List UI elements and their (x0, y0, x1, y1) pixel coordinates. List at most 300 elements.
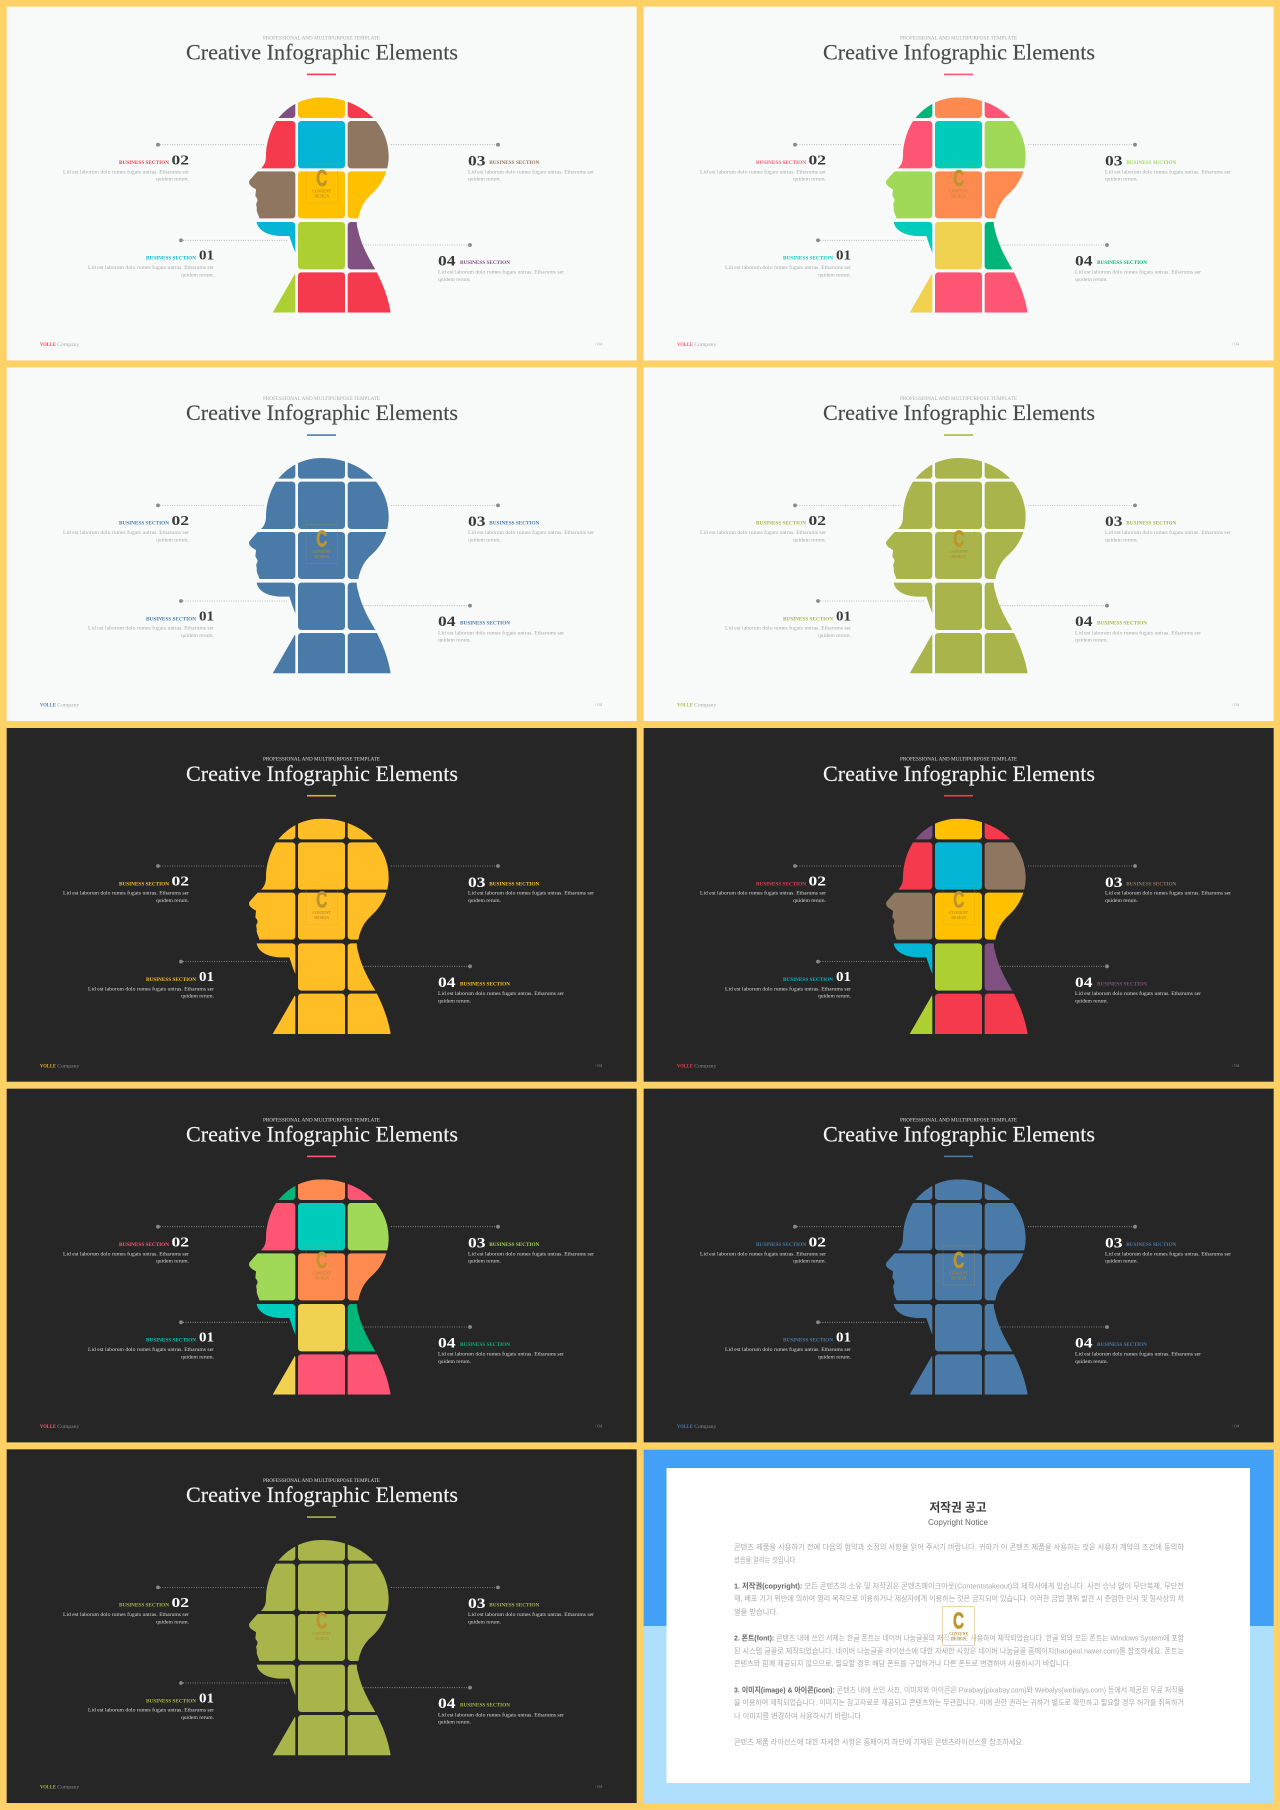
section 02: 02 (808, 152, 826, 167)
section 03 (1105, 875, 1231, 904)
section 01 (725, 248, 852, 278)
section 02: Lid est laborum dolo rumes fugats untras. Etharums ser (700, 168, 826, 175)
section 03 (1105, 154, 1231, 183)
watermark (306, 525, 338, 564)
section 04: quidem rerum. (1075, 1359, 1109, 1365)
leader 03 (1028, 503, 1137, 507)
section 01: Lid est laborum dolo rumes fugats untras. Etharums ser (725, 1346, 851, 1353)
section 02: Lid est laborum dolo rumes fugats untras. Etharums ser (700, 1250, 826, 1257)
leader 01 (179, 1681, 288, 1685)
footer (677, 342, 1240, 348)
watermark: CONTENT (949, 911, 969, 915)
section 01: 01 (199, 969, 214, 984)
leader 02 (793, 1225, 901, 1229)
section 01: 01 (836, 1330, 851, 1345)
watermark: C (953, 165, 964, 191)
section 03: Lid est laborum dolo rumes fugats untras. Etharums ser (468, 168, 594, 175)
section 02: Lid est laborum dolo rumes fugats untras. Etharums ser (63, 1250, 189, 1257)
section 01: quidem rerum. (181, 994, 215, 1000)
heading: Creative Infographic Elements (186, 40, 458, 64)
section 01: Lid est laborum dolo rumes fugats untras. Etharums ser (88, 985, 214, 992)
heading: PROFESSIONAL AND MULTIPURPOSE TEMPLATE (263, 757, 381, 763)
section 01: 01 (199, 1330, 214, 1345)
section 01: 01 (199, 1690, 214, 1705)
section 04 (438, 1696, 564, 1726)
footer: Company (694, 1063, 716, 1069)
heading (823, 35, 1095, 75)
copyright body: 을 이용하여 제작되었습니다. 이미지는 참고자료로 제공되고 콘텐츠와는 무관합니다. 이에 관한 권리는 귀하가 별도로 확인하고 필요할 경우 허가를 취득하거 (734, 1698, 1184, 1707)
watermark: CONTENT (949, 1272, 969, 1276)
section 02: BUSINESS SECTION (756, 1243, 807, 1248)
section 04 (1075, 254, 1201, 283)
leader 01 (816, 599, 925, 603)
heading: Creative Infographic Elements (823, 400, 1095, 425)
section 01: quidem rerum. (181, 1715, 215, 1721)
heading: PROFESSIONAL AND MULTIPURPOSE TEMPLATE (900, 757, 1018, 763)
section 01: 01 (836, 608, 851, 623)
section 02: BUSINESS SECTION (756, 882, 807, 887)
section 03: 03 (1105, 154, 1122, 170)
leader 01 (816, 238, 925, 242)
section 04: Lid est laborum dolo rumes fugats untras. Etharums ser (1075, 269, 1201, 276)
section 02: Lid est laborum dolo rumes fugats untras. Etharums ser (63, 529, 189, 536)
section 04 (1075, 614, 1201, 644)
leader 01 (816, 960, 925, 964)
section 02 (63, 1234, 190, 1265)
section 02: quidem rerum. (156, 898, 190, 904)
panel: light multicolor A (7, 7, 637, 360)
watermark: DESIGN (314, 1637, 329, 1641)
section 04: quidem rerum. (438, 998, 472, 1004)
footer: Company (57, 1785, 79, 1791)
watermark: C (316, 886, 327, 912)
section 04: BUSINESS SECTION (1097, 622, 1148, 627)
copyright body: 된 시스템 글꼴로 제작되었습니다. 네이버 나눔글꼴 라이선스에 대한 자세한 사항은 네이버 나눔글꼴 홈페이지(hangeul.naver.com)를 참조하세요. 폰트는 (734, 1647, 1184, 1656)
panel: dark olive monochrome (7, 1449, 637, 1803)
section 01 (725, 608, 852, 639)
section 04: 04 (1075, 614, 1092, 630)
section 01: Lid est laborum dolo rumes fugats untras. Etharums ser (725, 264, 851, 271)
section 04: Lid est laborum dolo rumes fugats untras. Etharums ser (1075, 1351, 1201, 1358)
section 02: 02 (172, 152, 189, 167)
footer: / 04 (1232, 1424, 1240, 1428)
watermark: DESIGN (951, 916, 966, 920)
watermark: C (953, 1247, 964, 1273)
footer (677, 1424, 1240, 1430)
footer: VOLLE (677, 703, 693, 709)
section 04: 04 (1075, 975, 1092, 991)
head chart (249, 819, 391, 1039)
section 02: BUSINESS SECTION (119, 522, 170, 527)
watermark (943, 1607, 974, 1646)
heading (186, 1117, 458, 1157)
section 04: quidem rerum. (1075, 998, 1109, 1004)
section 02 (700, 152, 827, 183)
footer: / 04 (595, 1424, 603, 1428)
section 01: BUSINESS SECTION (783, 617, 834, 622)
leader 01 (179, 1320, 288, 1324)
section 01: quidem rerum. (818, 272, 852, 278)
section 04: quidem rerum. (438, 1359, 472, 1365)
watermark: CONTENT (312, 550, 332, 554)
watermark: C (316, 1608, 327, 1634)
section 04: 04 (438, 975, 456, 991)
section 04: Lid est laborum dolo rumes fugats untras. Etharums ser (438, 629, 564, 636)
head chart (249, 97, 391, 317)
section 03 (1105, 1236, 1231, 1265)
leader 03 (391, 503, 500, 507)
watermark: DESIGN (951, 194, 966, 198)
section 03: BUSINESS SECTION (489, 1243, 540, 1248)
section 02 (700, 874, 827, 904)
section 03: quidem rerum. (468, 177, 502, 183)
section 02: quidem rerum. (793, 177, 827, 183)
heading (186, 35, 458, 75)
head chart (886, 458, 1028, 678)
section 01: BUSINESS SECTION (783, 257, 834, 262)
section 02: 02 (808, 1234, 826, 1249)
section 02 (700, 1234, 827, 1265)
section 01: BUSINESS SECTION (783, 978, 834, 983)
section 02: 02 (172, 1595, 189, 1610)
leader 04 (1000, 964, 1109, 968)
section 01 (725, 1330, 852, 1360)
section 02: 02 (172, 513, 189, 528)
section 03: BUSINESS SECTION (489, 161, 540, 166)
footer: / 04 (595, 1784, 603, 1789)
leader 01 (179, 599, 288, 603)
footer: VOLLE (677, 1063, 693, 1069)
watermark: DESIGN (314, 1276, 329, 1280)
copyright body: 셨음을 알리는 것입니다. (734, 1555, 797, 1564)
watermark: DESIGN (314, 916, 329, 920)
head chart (249, 1179, 391, 1399)
footer: Company (57, 703, 79, 709)
section 03: 03 (1105, 514, 1122, 530)
watermark: C (953, 526, 964, 552)
copyright body: 콘텐츠 제품 라이선스에 대한 자세한 사항은 홈페이지 하단에 기재된 콘텐츠라이선스를 참조하세요. (734, 1737, 1024, 1746)
footer (40, 342, 603, 348)
section 02: BUSINESS SECTION (119, 1604, 170, 1609)
watermark: CONTENT (949, 190, 969, 194)
heading (823, 1117, 1095, 1157)
footer: Company (57, 1063, 79, 1069)
section 03: quidem rerum. (468, 537, 502, 543)
copyright body: 벌을 받습니다. (734, 1608, 778, 1617)
section 03: 03 (468, 1236, 486, 1252)
section 03 (468, 154, 594, 183)
head chart (886, 819, 1028, 1039)
section 02 (63, 1595, 190, 1625)
heading: Creative Infographic Elements (823, 761, 1095, 786)
section 03: Lid est laborum dolo rumes fugats untras. Etharums ser (468, 1250, 594, 1257)
section 02: BUSINESS SECTION (119, 1243, 170, 1248)
heading: Creative Infographic Elements (186, 761, 458, 786)
leader 02 (156, 503, 264, 507)
panel: light multicolor B (644, 7, 1274, 360)
section 04: Lid est laborum dolo rumes fugats untras. Etharums ser (1075, 629, 1201, 636)
section 03 (1105, 514, 1231, 543)
section 01: quidem rerum. (818, 1354, 852, 1360)
section 03: BUSINESS SECTION (1126, 882, 1177, 887)
leader 01 (179, 960, 288, 964)
section 04 (438, 1336, 564, 1365)
section 03: Lid est laborum dolo rumes fugats untras. Etharums ser (1105, 1250, 1231, 1257)
watermark: C (316, 526, 327, 552)
heading: PROFESSIONAL AND MULTIPURPOSE TEMPLATE (900, 35, 1018, 41)
section 04: BUSINESS SECTION (460, 622, 511, 627)
section 04: quidem rerum. (1075, 277, 1109, 283)
copyright heading: 저작권 공고 (930, 1500, 986, 1514)
heading (823, 396, 1095, 436)
section 02: BUSINESS SECTION (119, 161, 170, 166)
section 03: quidem rerum. (1105, 898, 1139, 904)
section 02: quidem rerum. (156, 177, 190, 183)
section 04: quidem rerum. (438, 277, 472, 283)
leader 04 (363, 1325, 472, 1329)
section 01 (88, 1330, 215, 1360)
footer: / 04 (1232, 1063, 1240, 1068)
watermark (306, 885, 338, 924)
section 01: quidem rerum. (181, 633, 215, 639)
section 03: Lid est laborum dolo rumes fugats untras. Etharums ser (468, 1611, 594, 1618)
watermark: CONTENT (312, 1632, 332, 1636)
section 02: quidem rerum. (793, 537, 827, 543)
watermark: DESIGN (951, 1276, 966, 1280)
section 02: 02 (172, 1234, 189, 1249)
watermark: C (953, 1608, 964, 1634)
watermark: DESIGN (314, 555, 329, 559)
footer: VOLLE (40, 1063, 56, 1069)
section 04: 04 (438, 1336, 456, 1352)
watermark: CONTENT (312, 1272, 332, 1276)
panel: light blue monochrome (7, 367, 637, 721)
footer: Company (694, 1424, 716, 1430)
section 04: Lid est laborum dolo rumes fugats untras. Etharums ser (438, 990, 564, 997)
section 03: Lid est laborum dolo rumes fugats untras. Etharums ser (468, 529, 594, 536)
section 03: BUSINESS SECTION (489, 882, 540, 887)
heading: Creative Infographic Elements (823, 1122, 1095, 1146)
copyright body: 2. 폰트(font): 콘텐츠 내에 쓰인 서체는 한글 폰트는 네이버 나눔글꼴의 저작권으로 사용하여 제작되었습니다. 한글 외의 모든 폰트는 Windows System에 포함 (734, 1633, 1184, 1642)
heading (823, 757, 1095, 797)
heading: PROFESSIONAL AND MULTIPURPOSE TEMPLATE (263, 1117, 381, 1123)
watermark: C (953, 886, 964, 912)
section 03: Lid est laborum dolo rumes fugats untras. Etharums ser (1105, 168, 1231, 175)
leader 01 (179, 238, 288, 242)
footer: Company (694, 703, 716, 709)
watermark: C (316, 165, 327, 191)
leader 03 (391, 1225, 500, 1229)
section 01: 01 (199, 248, 214, 263)
watermark: DESIGN (951, 555, 966, 559)
copyright body: 콘텐츠와 함께 제공되지 않으므로, 필요할 경우 해당 폰트를 구입하거나 다른 폰트로 변경하여 사용하시기 바랍니다. (734, 1659, 1071, 1668)
section 04: BUSINESS SECTION (1097, 1343, 1148, 1348)
section 02: 02 (808, 874, 826, 889)
watermark: CONTENT (312, 911, 332, 915)
section 02: BUSINESS SECTION (756, 522, 807, 527)
watermark (306, 1607, 338, 1646)
section 04: Lid est laborum dolo rumes fugats untras. Etharums ser (438, 1711, 564, 1718)
section 02: Lid est laborum dolo rumes fugats untras. Etharums ser (63, 168, 189, 175)
section 02 (700, 513, 827, 543)
section 01: Lid est laborum dolo rumes fugats untras. Etharums ser (88, 1707, 214, 1714)
section 02: quidem rerum. (793, 898, 827, 904)
panel: dark multicolor A (644, 728, 1274, 1082)
section 01: BUSINESS SECTION (783, 1339, 834, 1344)
footer: VOLLE (40, 703, 56, 709)
section 02: Lid est laborum dolo rumes fugats untras. Etharums ser (700, 890, 826, 897)
section 01: 01 (836, 248, 851, 263)
section 04: 04 (438, 1696, 456, 1712)
leader 02 (156, 864, 264, 868)
section 04 (438, 254, 564, 283)
heading: Creative Infographic Elements (823, 40, 1095, 64)
leader 02 (156, 143, 264, 147)
footer: VOLLE (677, 342, 693, 348)
section 03: BUSINESS SECTION (489, 1604, 540, 1609)
section 01: quidem rerum. (818, 633, 852, 639)
section 01: BUSINESS SECTION (146, 257, 197, 262)
footer (40, 1424, 603, 1430)
section 01: 01 (836, 969, 851, 984)
section 02 (63, 152, 190, 183)
panel: dark yellow monochrome (7, 728, 637, 1082)
leader 04 (1000, 604, 1109, 608)
head chart (249, 458, 391, 678)
leader 02 (156, 1225, 264, 1229)
section 02: Lid est laborum dolo rumes fugats untras. Etharums ser (700, 529, 826, 536)
section 04 (1075, 975, 1201, 1004)
section 02: Lid est laborum dolo rumes fugats untras. Etharums ser (63, 890, 189, 897)
section 01 (88, 248, 215, 278)
section 03: quidem rerum. (1105, 537, 1139, 543)
watermark (943, 525, 974, 564)
panel: dark blue monochrome (644, 1089, 1274, 1442)
footer: / 04 (595, 1063, 603, 1068)
section 01: 01 (199, 608, 214, 623)
heading (186, 757, 458, 797)
leader 03 (391, 143, 500, 147)
section 03: quidem rerum. (468, 1619, 502, 1625)
watermark: DESIGN (951, 1637, 966, 1641)
footer (40, 702, 603, 709)
section 03: 03 (468, 875, 486, 891)
section 01 (725, 969, 852, 1000)
section 01: BUSINESS SECTION (146, 1699, 197, 1704)
leader 03 (1028, 864, 1137, 868)
section 04: BUSINESS SECTION (460, 982, 511, 987)
section 01: BUSINESS SECTION (146, 1339, 197, 1344)
watermark: CONTENT (949, 550, 969, 554)
footer (677, 1063, 1240, 1069)
section 01: quidem rerum. (181, 272, 215, 278)
leader 04 (363, 964, 472, 968)
footer (677, 702, 1240, 709)
footer (40, 1063, 603, 1069)
section 01 (88, 1690, 215, 1721)
section 03 (468, 1236, 594, 1265)
section 02: quidem rerum. (156, 537, 190, 543)
head chart (249, 1540, 391, 1760)
copyright body: 1. 저작권(copyright): 모든 콘텐츠의 소유 및 저작권은 콘텐츠메이크아웃(Contentstakeout)의 제작사에게 있습니다. 사전 승낙 없이 무단복제, 무단전 (734, 1581, 1184, 1590)
section 04: 04 (438, 254, 456, 270)
copyright heading (928, 1500, 988, 1527)
section 04 (438, 975, 564, 1004)
copyright body: 나 이미지를 변경하여 사용하시기 바랍니다. (734, 1711, 863, 1720)
heading: PROFESSIONAL AND MULTIPURPOSE TEMPLATE (263, 396, 381, 402)
watermark: CONTENT (312, 190, 332, 194)
section 03: Lid est laborum dolo rumes fugats untras. Etharums ser (1105, 890, 1231, 897)
panel: dark multicolor B (7, 1089, 637, 1442)
copyright body: 콘텐츠 제품을 사용하기 전에 다음의 협약과 소정의 사항을 읽어 주시기 바랍니다. 귀하가 이 콘텐츠 제품을 사용하는 것은 사용자 계약의 조건에 동의하 (734, 1543, 1184, 1552)
watermark: DESIGN (314, 194, 329, 198)
panel: copyright notice (644, 1450, 1274, 1803)
section 03: BUSINESS SECTION (1126, 522, 1177, 527)
section 01 (88, 608, 215, 639)
section 01: Lid est laborum dolo rumes fugats untras. Etharums ser (725, 985, 851, 992)
footer: Company (57, 1424, 79, 1430)
section 02: quidem rerum. (156, 1619, 190, 1625)
heading: PROFESSIONAL AND MULTIPURPOSE TEMPLATE (900, 1117, 1018, 1123)
section 02 (63, 874, 190, 904)
leader 02 (793, 864, 901, 868)
section 03: 03 (1105, 1236, 1122, 1252)
watermark (943, 164, 974, 203)
copyright heading: Copyright Notice (928, 1517, 988, 1527)
section 02: BUSINESS SECTION (119, 882, 170, 887)
section 02: quidem rerum. (793, 1259, 827, 1265)
leader 04 (363, 1686, 472, 1690)
watermark: CONTENT (949, 1632, 968, 1636)
copyright body (734, 1543, 1184, 1746)
footer: Company (694, 342, 716, 348)
section 04: Lid est laborum dolo rumes fugats untras. Etharums ser (438, 1351, 564, 1358)
head chart (886, 1179, 1028, 1399)
watermark (943, 885, 974, 924)
watermark: C (316, 1247, 327, 1273)
leader 04 (363, 243, 472, 247)
section 04: quidem rerum. (438, 638, 472, 644)
section 01: Lid est laborum dolo rumes fugats untras. Etharums ser (88, 264, 214, 271)
section 04 (438, 614, 564, 644)
leader 02 (793, 143, 901, 147)
section 01: BUSINESS SECTION (146, 978, 197, 983)
leader 04 (1000, 243, 1109, 247)
section 02 (63, 513, 190, 543)
section 02: 02 (808, 513, 826, 528)
section 01: Lid est laborum dolo rumes fugats untras. Etharums ser (725, 625, 851, 632)
section 02: quidem rerum. (156, 1259, 190, 1265)
leader 02 (793, 503, 901, 507)
leader 04 (1000, 1325, 1109, 1329)
leader 04 (363, 604, 472, 608)
footer: Company (57, 342, 79, 348)
section 04: BUSINESS SECTION (1097, 261, 1148, 266)
section 04: 04 (1075, 254, 1092, 270)
section 02: Lid est laborum dolo rumes fugats untras. Etharums ser (63, 1611, 189, 1618)
section 03: Lid est laborum dolo rumes fugats untras. Etharums ser (1105, 529, 1231, 536)
footer: VOLLE (40, 1785, 56, 1791)
leader 01 (816, 1320, 925, 1324)
watermark (943, 1246, 974, 1285)
section 03: 03 (468, 1596, 486, 1612)
section 01: BUSINESS SECTION (146, 617, 197, 622)
section 01: Lid est laborum dolo rumes fugats untras. Etharums ser (88, 1346, 214, 1353)
heading: PROFESSIONAL AND MULTIPURPOSE TEMPLATE (263, 35, 381, 41)
section 03: Lid est laborum dolo rumes fugats untras. Etharums ser (468, 890, 594, 897)
watermark (306, 164, 338, 203)
section 04: 04 (1075, 1336, 1092, 1352)
